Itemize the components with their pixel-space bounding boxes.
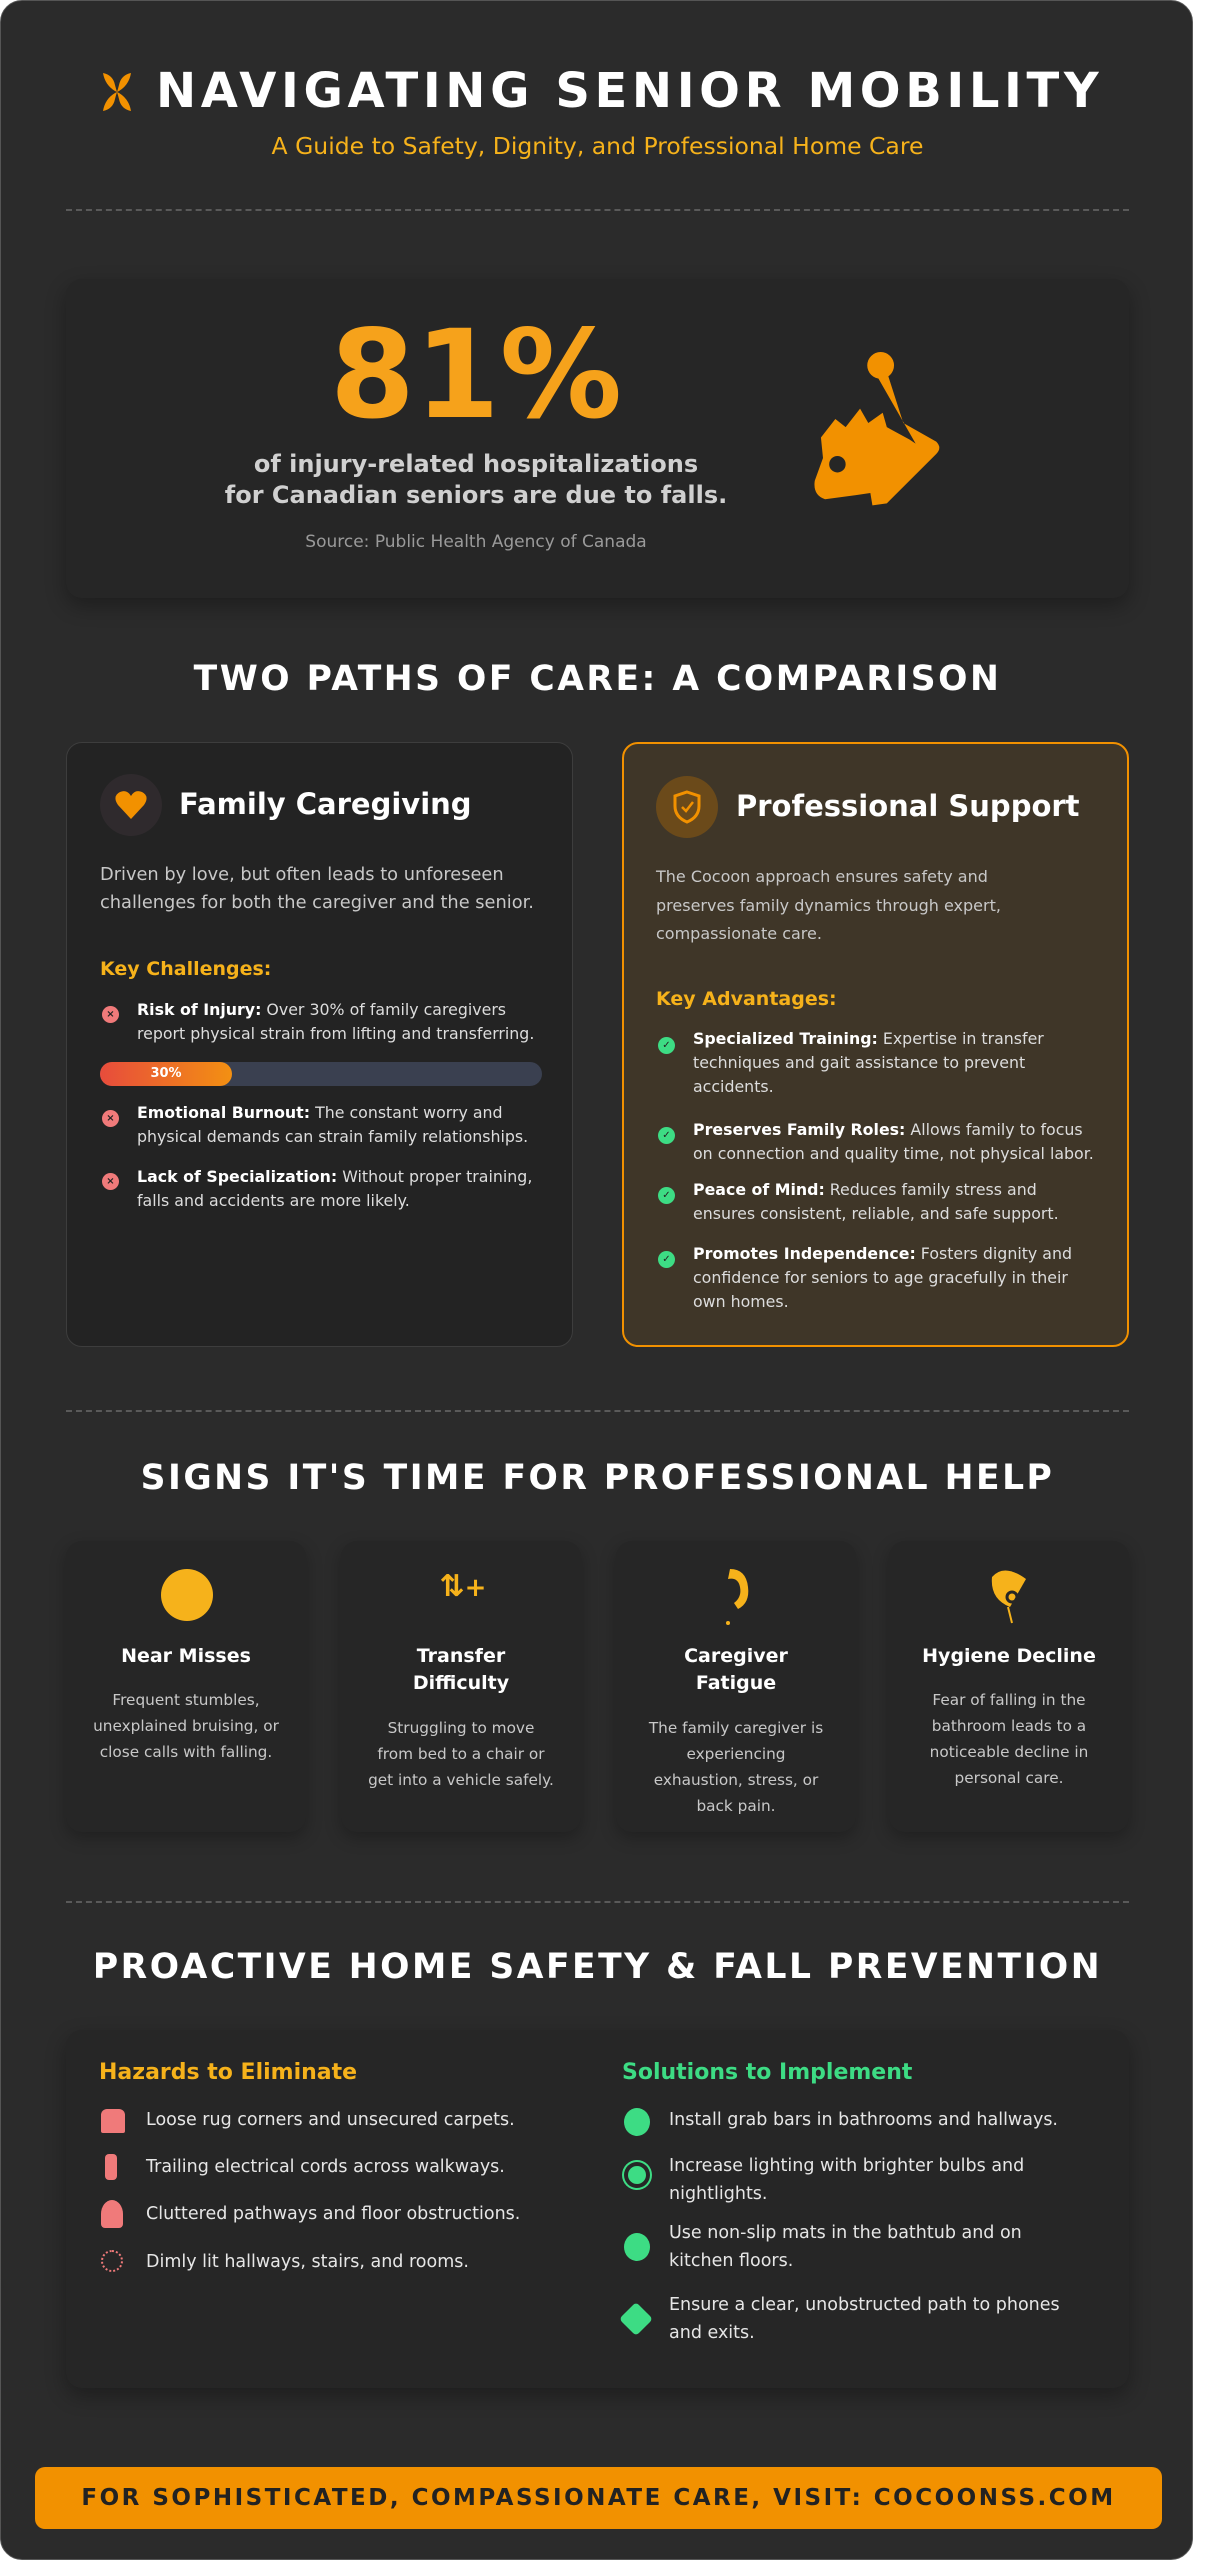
list: challenges: × [106, 1113, 115, 1124]
list: advantages: techniques and gait assistance to prevent [693, 1053, 1025, 1072]
column: hazards [99, 2060, 520, 2272]
sign card: near misses: close calls with falling. [100, 1743, 272, 1761]
subtitle: A Guide to Safety, Dignity, and Professional Home Care [272, 132, 923, 160]
list: advantages: Specialized Training: Expertise in transfer [693, 1029, 1044, 1048]
icon: shield [656, 776, 718, 838]
column: solutions: Ensure a clear, unobstructed path to phones [669, 2295, 1060, 2315]
sign card: transfer difficulty: get into a vehicle safely. [368, 1771, 554, 1789]
list: advantages: Preserves Family Roles: Allows family to focus [693, 1120, 1083, 1139]
column: solutions: Use non-slip mats in the bathtub and on [669, 2223, 1022, 2243]
sign card: near misses: Near Misses [121, 1645, 251, 1667]
list: challenges: physical demands can strain family relationships. [137, 1127, 528, 1146]
list: advantages: ensures consistent, reliable, and safe support. [693, 1204, 1059, 1223]
sign card: caregiver fatigue: The family caregiver is [649, 1719, 823, 1737]
card heading: Professional Support [736, 789, 1080, 823]
description [100, 864, 534, 913]
subheading: Key Advantages: [656, 988, 837, 1010]
sign card: hygiene decline [889, 1541, 1129, 1832]
title: NAVIGATING SENIOR MOBILITY [156, 63, 1103, 119]
panel: statistic [66, 279, 1129, 598]
list: advantages: Promotes Independence: Fosters dignity and [693, 1244, 1072, 1263]
footer banner: FOR SOPHISTICATED, COMPASSIONATE CARE, VISIT: COCOONSS.COM [81, 2485, 1116, 2511]
description: preserves family dynamics through expert, [656, 896, 1001, 914]
list: advantages: confidence for seniors to age gracefully in their [693, 1268, 1068, 1287]
sign card: transfer difficulty: Transfer [417, 1645, 505, 1667]
list: challenges: × [106, 1009, 115, 1020]
column: solutions: Install grab bars in bathrooms and hallways. [669, 2110, 1058, 2130]
list: advantages [658, 1029, 1094, 1311]
description: compassionate care. [656, 924, 822, 943]
list: challenges: Risk of Injury: Over 30% of family caregivers [137, 1000, 506, 1019]
sign card: transfer difficulty: Difficulty [413, 1672, 509, 1694]
icon: circle [161, 1569, 213, 1621]
sign card: hygiene decline: bathroom leads to a [932, 1717, 1086, 1735]
list: challenges: report physical strain from lifting and transferring. [137, 1024, 534, 1043]
sign card: caregiver fatigue: back pain. [696, 1797, 776, 1815]
list: advantages: ✓ [662, 1190, 671, 1201]
icon: head [726, 1569, 748, 1625]
description: The Cocoon approach ensures safety and [656, 867, 988, 886]
sign card: near misses [66, 1541, 306, 1832]
panel: family caregiving [66, 742, 573, 1347]
big number: 81% [330, 304, 622, 446]
progress bar [100, 1062, 542, 1086]
stat text: for Canadian seniors are due to falls. [225, 481, 727, 509]
list: advantages: ✓ [662, 1040, 671, 1051]
description: challenges for both the caregiver and the senior. [100, 892, 534, 913]
column: hazards: Trailing electrical cords across walkways. [146, 2157, 505, 2177]
stat text [225, 450, 727, 509]
column: solutions: kitchen floors. [669, 2251, 793, 2271]
column: solutions [620, 2060, 1060, 2343]
source: Source: Public Health Agency of Canada [305, 532, 647, 552]
sign card: hygiene decline: Fear of falling in the [932, 1691, 1086, 1709]
list: challenges: × [106, 1176, 115, 1187]
column: solutions: Solutions to Implement [622, 2060, 912, 2085]
icon: heart [100, 774, 162, 836]
description [656, 867, 1001, 943]
column: solutions: nightlights. [669, 2184, 767, 2204]
column: hazards: Loose rug corners and unsecured carpets. [146, 2110, 515, 2130]
list: challenges [100, 1000, 542, 1210]
subheading: Key Challenges: [100, 958, 271, 980]
card heading: Family Caregiving [179, 787, 472, 821]
panel: home safety [66, 2030, 1129, 2388]
column: hazards: Cluttered pathways and floor obstructions. [146, 2204, 520, 2224]
icon: transfer: ⇅+ [440, 1569, 486, 1604]
sign card: caregiver fatigue: Caregiver [684, 1645, 788, 1667]
sign card: near misses: unexplained bruising, or [93, 1717, 279, 1735]
list: advantages: own homes. [693, 1292, 789, 1311]
list: advantages: accidents. [693, 1077, 774, 1096]
column: hazards: Dimly lit hallways, stairs, and rooms. [146, 2252, 469, 2272]
heading: two paths: TWO PATHS OF CARE: A COMPARISON [194, 659, 1001, 699]
list: advantages: ✓ [662, 1254, 671, 1265]
list: advantages: Peace of Mind: Reduces family stress and [693, 1180, 1037, 1199]
sign card: near misses: Frequent stumbles, [112, 1691, 260, 1709]
sign card: caregiver fatigue: exhaustion, stress, or [654, 1771, 818, 1789]
column: hazards: Hazards to Eliminate [99, 2060, 357, 2085]
icon: falling person [814, 352, 940, 506]
sign card: hygiene decline: personal care. [955, 1769, 1063, 1787]
sign card: transfer difficulty [341, 1541, 581, 1832]
sign card: transfer difficulty: Struggling to move [388, 1719, 534, 1737]
list: challenges: falls and accidents are more likely. [137, 1191, 410, 1210]
column: solutions: Increase lighting with brighter bulbs and [669, 2156, 1024, 2176]
footer banner [35, 2467, 1162, 2529]
sign card: transfer difficulty: from bed to a chair or [377, 1745, 545, 1763]
icon: logo [103, 73, 131, 111]
panel: professional support [622, 742, 1129, 1347]
sign card: caregiver fatigue: experiencing [686, 1745, 786, 1763]
icon: shower [992, 1570, 1026, 1624]
heading: signs: SIGNS IT'S TIME FOR PROFESSIONAL HELP [141, 1458, 1054, 1498]
list: challenges: Lack of Specialization: Without proper training, [137, 1167, 532, 1186]
sign card: hygiene decline: Hygiene Decline [922, 1645, 1096, 1667]
sign card: hygiene decline: noticeable decline in [930, 1743, 1088, 1761]
list: advantages: on connection and quality time, not physical labor. [693, 1144, 1094, 1163]
stat text: of injury-related hospitalizations [254, 450, 698, 478]
heading: home safety: PROACTIVE HOME SAFETY & FALL PREVENTION [93, 1947, 1102, 1987]
description: Driven by love, but often leads to unforeseen [100, 864, 504, 885]
list: challenges: Emotional Burnout: The constant worry and [137, 1103, 503, 1122]
sign card: caregiver fatigue [616, 1541, 856, 1832]
list: advantages: ✓ [662, 1130, 671, 1141]
column: solutions: and exits. [669, 2323, 755, 2343]
sign card: caregiver fatigue: Fatigue [696, 1672, 776, 1694]
progress bar: 30% [150, 1066, 182, 1081]
